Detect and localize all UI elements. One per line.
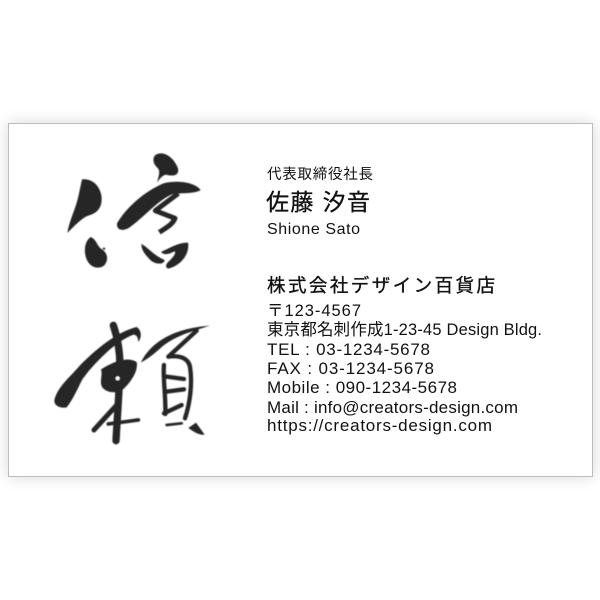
calligraphy: 信 (67, 153, 201, 269)
company name: 株式会社デザイン百貨店 (267, 275, 495, 296)
mobile: Mobile : 090-1234-5678 (267, 378, 457, 397)
job title: 代表取締役社長 (267, 166, 373, 183)
telephone: TEL : 03-1234-5678 (267, 340, 430, 359)
calligraphy: 頼 (54, 325, 210, 441)
fax: FAX : 03-1234-5678 (267, 359, 434, 378)
person name: 佐藤 汐音 (266, 189, 370, 215)
panel: business card (8, 123, 593, 477)
address: 東京都名刺作成1-23-45 Design Bldg. (267, 320, 542, 339)
postal code: 〒123-4567 (267, 302, 361, 320)
website: https://creators-design.com (267, 416, 492, 435)
romanized name: Shione Sato (267, 221, 360, 238)
mail: Mail : info@creators-design.com (267, 398, 518, 417)
